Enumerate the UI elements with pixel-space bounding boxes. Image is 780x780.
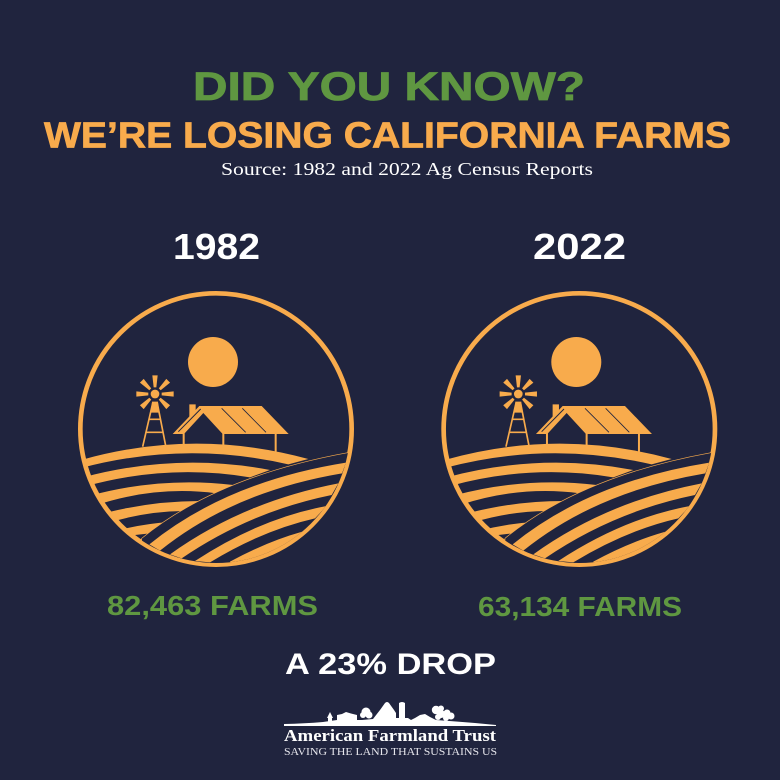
icon: farm 2022 xyxy=(443,293,727,578)
year label 2022: 2022 xyxy=(533,226,626,267)
logo name: American Farmland Trust xyxy=(284,726,497,745)
logo tagline: SAVING THE LAND THAT SUSTAINS US xyxy=(284,747,497,758)
title: did you know: DID YOU KNOW? xyxy=(193,65,585,109)
icon: farm 1982 xyxy=(80,293,363,578)
logo silhouette xyxy=(284,702,496,726)
heading: losing california farms: WE’RE LOSING CALIFORNIA FARMS xyxy=(44,114,731,156)
stat: 2022 farms: 63,134 FARMS xyxy=(478,591,682,622)
callout: 23% drop: A 23% DROP xyxy=(285,648,496,681)
source line: Source: 1982 and 2022 Ag Census Reports xyxy=(221,159,593,179)
logo: American Farmland Trust xyxy=(284,702,497,758)
year label 1982: 1982 xyxy=(173,226,260,267)
stat: 1982 farms: 82,463 FARMS xyxy=(107,590,318,621)
